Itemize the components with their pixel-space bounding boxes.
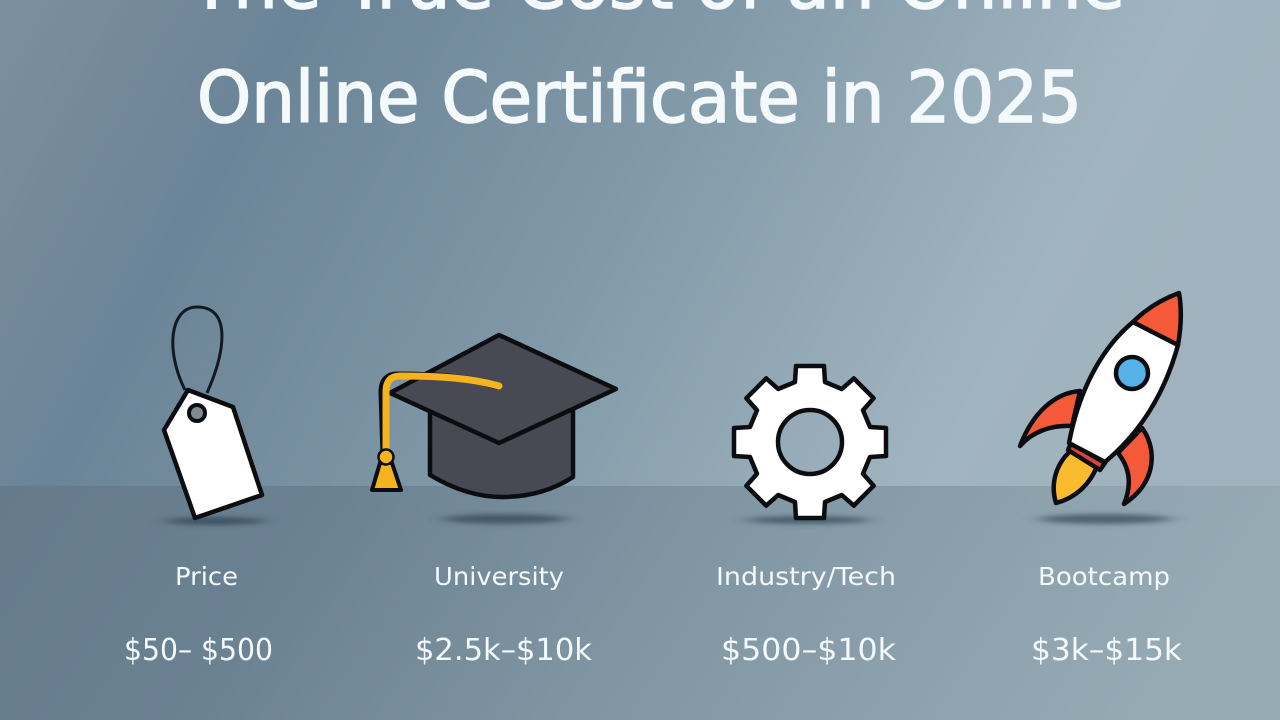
title: Online Certificate in 2025 bbox=[197, 56, 1082, 139]
value: industry/tech: $500–$10k bbox=[721, 633, 897, 668]
title bbox=[189, 0, 1125, 139]
icon: rocket bbox=[1020, 293, 1181, 504]
panel: price bbox=[124, 307, 273, 668]
icon: price tag bbox=[164, 307, 262, 518]
label: bootcamp: Bootcamp bbox=[1038, 562, 1170, 591]
label: price: Price bbox=[175, 562, 238, 591]
value: university: $2.5k–$10k bbox=[415, 633, 593, 668]
value: bootcamp: $3k–$15k bbox=[1031, 633, 1183, 668]
panel: industry/tech bbox=[716, 366, 897, 668]
icon: gear bbox=[734, 366, 886, 518]
icon shadow: price tag bbox=[165, 517, 265, 525]
panel: bootcamp bbox=[1020, 293, 1183, 668]
icon shadow: rocket bbox=[1039, 514, 1171, 524]
label: industry/tech: Industry/Tech bbox=[716, 562, 896, 591]
label: university: University bbox=[434, 562, 564, 591]
icon shadow: gear bbox=[746, 516, 870, 524]
value: price: $50– $500 bbox=[124, 633, 273, 668]
panel: university bbox=[372, 335, 616, 668]
icon shadow: cap bbox=[443, 514, 567, 524]
icon: graduation cap bbox=[372, 335, 616, 497]
floor band bbox=[0, 486, 1280, 720]
